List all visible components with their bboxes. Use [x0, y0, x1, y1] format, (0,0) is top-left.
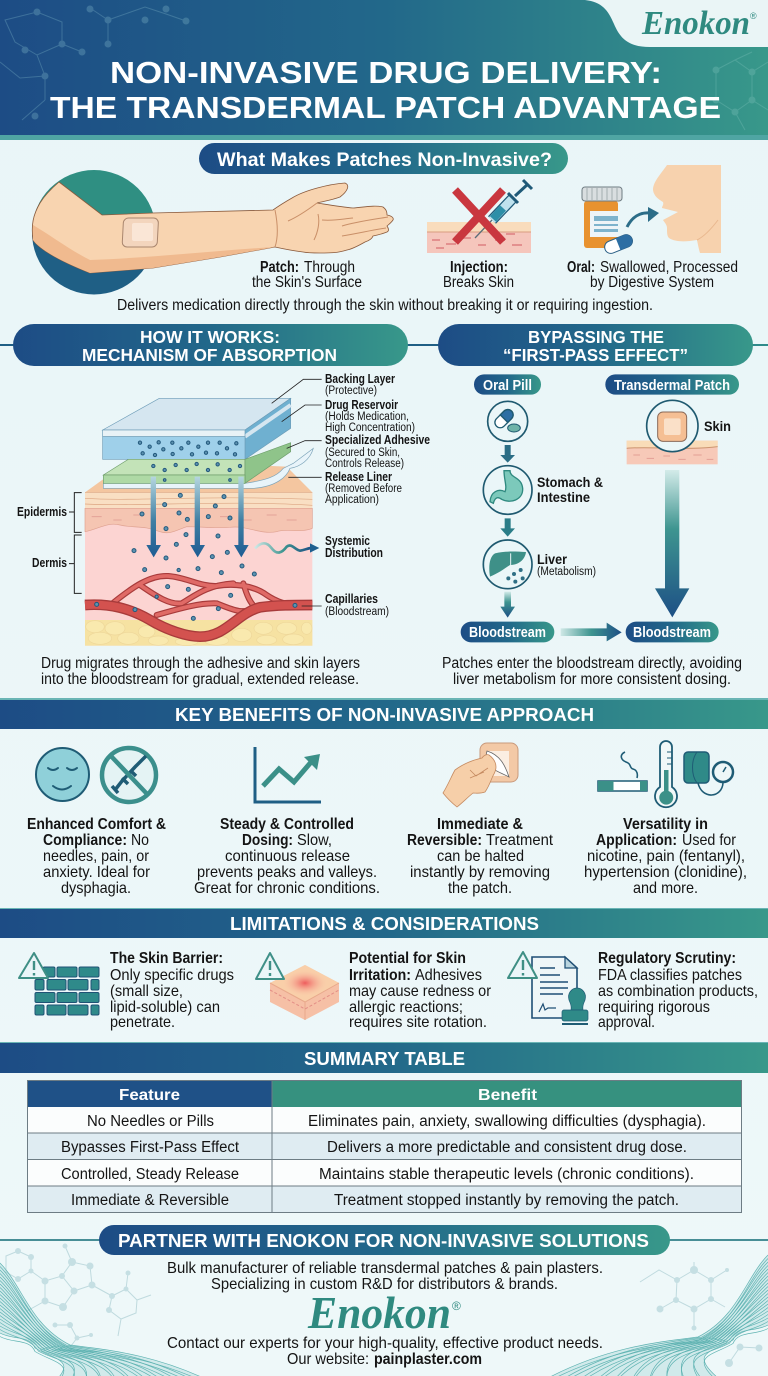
labels: patch layers: Capillaries — [325, 592, 378, 606]
labels: patch layers: (Secured to Skin, — [325, 447, 400, 459]
limitation: skin irritation: Adhesives — [415, 967, 482, 984]
captions: routes of delivery: Oral: — [567, 259, 595, 276]
limitation: skin irritation: allergic reactions; — [349, 999, 463, 1016]
benefit: comfort — [27, 816, 166, 897]
benefit: versatility: Application: — [596, 832, 677, 849]
benefit: reversible — [407, 816, 554, 897]
benefit: reversible: Reversible: — [407, 832, 482, 849]
labels: skin layers: Epidermis — [17, 505, 67, 519]
logo: top right: ® — [750, 11, 757, 21]
capillaries — [85, 576, 312, 637]
icon: rising chart — [255, 747, 321, 802]
title: THE TRANSDERMAL PATCH ADVANTAGE — [50, 90, 721, 125]
labels: patch layers: (Holds Medication, — [325, 411, 409, 423]
benefit: comfort: dysphagia. — [61, 880, 131, 897]
benefit: reversible: Treatment — [486, 832, 554, 849]
title — [50, 55, 721, 125]
benefit: reversible: instantly by removing — [410, 864, 550, 881]
limitation: regulatory scrutiny: Regulatory Scrutiny: — [598, 950, 736, 967]
captions: routes of delivery: Injection: — [450, 259, 508, 276]
labels: flow chart — [469, 378, 731, 641]
captions: routes of delivery: by Digestive System — [590, 274, 714, 291]
labels: flow chart: Stomach & — [537, 474, 603, 490]
benefit: reversible: the patch. — [448, 880, 512, 897]
icon: pill bottle and mouth — [582, 165, 721, 255]
skin brackets — [69, 493, 82, 593]
labels: flow chart: (Metabolism) — [537, 566, 596, 578]
labels: flow chart: Skin — [704, 418, 731, 434]
table rows: Eliminates pain, anxiety, swallowing difficulties (dysphagia). — [308, 1113, 706, 1130]
benefit: steady dosing: Steady & Controlled — [220, 816, 354, 833]
table rows: Controlled, Steady Release — [61, 1166, 239, 1183]
labels: patch layers: Release Liner — [325, 470, 392, 484]
text: manufacturer description — [167, 1260, 603, 1293]
labels: flow chart: Oral Pill — [483, 378, 532, 394]
labels: patch layers: (Bloodstream) — [325, 606, 389, 618]
backing and reservoir layers — [103, 398, 291, 459]
labels: skin layers: Dermis — [32, 556, 67, 570]
table header: Feature — [119, 1087, 180, 1104]
heading: how it works — [0, 324, 438, 366]
limitation: skin irritation: requires site rotation. — [349, 1014, 487, 1031]
benefit: versatility: and more. — [633, 880, 698, 897]
labels: flow chart: Intestine — [537, 489, 590, 505]
benefit: steady dosing: Dosing: — [242, 832, 293, 849]
labels: flow chart: Transdermal Patch — [614, 378, 730, 394]
text: first-pass summary — [442, 655, 742, 688]
icon: irritated skin — [256, 953, 339, 1020]
flow chart: oral vs transdermal — [461, 374, 739, 642]
captions: routes of delivery: Swallowed, Processed — [600, 259, 738, 276]
benefit: reversible: can be halted — [437, 848, 524, 865]
oral pill tag — [474, 374, 541, 395]
logo: footer: ® — [452, 1299, 461, 1313]
benefit: comfort: anxiety. Ideal for — [43, 864, 151, 881]
table rows: No Needles or Pills — [87, 1113, 214, 1130]
icon: hand removing patch — [443, 743, 518, 807]
heading: bypassing the first-pass effect: BYPASSING THE — [528, 327, 664, 347]
icon: patch on skin — [627, 400, 718, 464]
heading band: key benefits — [0, 698, 768, 729]
heading: bypassing the first-pass effect — [438, 324, 768, 366]
icon: arm with patch — [32, 170, 393, 294]
heading band: summary table: SUMMARY TABLE — [304, 1048, 465, 1069]
benefit: versatility: Versatility in — [623, 816, 708, 833]
skin layers — [85, 460, 312, 646]
heading band: limitations — [0, 908, 768, 938]
labels: patch layers: Application) — [325, 494, 379, 506]
systemic distribution arrow — [255, 543, 319, 553]
text: first-pass summary: liver metabolism for more consistent dosing. — [453, 671, 731, 688]
benefit: steady dosing: Slow, — [297, 832, 332, 849]
table rows: Bypasses First-Pass Effect — [61, 1139, 240, 1156]
benefit: comfort: Enhanced Comfort & — [27, 816, 166, 833]
benefit: steady dosing: Great for chronic conditions. — [194, 880, 380, 897]
leader lines — [272, 379, 322, 606]
limitation: skin barrier — [110, 950, 234, 1031]
benefit: versatility — [584, 816, 747, 897]
text: contact: Our website: — [287, 1351, 369, 1368]
table rows: Maintains stable therapeutic levels (chronic conditions). — [319, 1166, 694, 1183]
heading band: key benefits: KEY BENEFITS OF NON-INVASIVE APPROACH — [175, 704, 594, 725]
benefit: comfort: needles, pain, or — [43, 848, 150, 865]
text: non-invasive summary: Delivers medication directly through the skin without breaking it or requiring ingestion. — [117, 297, 653, 314]
captions: routes of delivery: Breaks Skin — [443, 274, 514, 291]
table header — [119, 1087, 538, 1104]
benefit: versatility: nicotine, pain (fentanyl), — [587, 848, 745, 865]
icon: calm face — [36, 748, 89, 801]
drug flow arrows — [146, 477, 249, 557]
limitation: skin barrier: penetrate. — [110, 1014, 175, 1031]
drug molecules — [95, 441, 297, 620]
labels: skin layers — [17, 505, 67, 570]
arrow: bloodstream link — [561, 623, 622, 641]
heading band: limitations: LIMITATIONS & CONSIDERATIONS — [230, 913, 539, 934]
labels: patch layers: Backing Layer — [325, 372, 395, 386]
summary table — [28, 1080, 742, 1212]
benefit: comfort: No — [131, 832, 149, 849]
logo: top right: Enokon — [641, 5, 750, 42]
text: absorption summary: into the bloodstream for gradual, extended release. — [41, 671, 359, 688]
limitation: skin irritation: Potential for Skin — [349, 950, 466, 967]
benefit: comfort: Compliance: — [43, 832, 127, 849]
table header: Benefit — [478, 1087, 538, 1104]
captions: routes of delivery: Through — [304, 259, 355, 276]
benefit: steady dosing: continuous release — [225, 848, 350, 865]
heading: how it works: MECHANISM OF ABSORPTION — [82, 345, 337, 365]
heading: how it works: HOW IT WORKS: — [140, 327, 280, 347]
diagram: patch layers over skin — [69, 379, 322, 646]
labels: flow chart: Liver — [537, 551, 567, 567]
heading: partner with enokon — [0, 1225, 768, 1255]
text: first-pass summary: Patches enter the bloodstream directly, avoiding — [442, 655, 742, 672]
limitation: skin barrier: Only specific drugs — [110, 967, 234, 984]
table rows: Treatment stopped instantly by removing the patch. — [334, 1192, 679, 1209]
bloodstream tags — [461, 622, 719, 642]
limitation: regulatory scrutiny — [598, 950, 758, 1031]
limitation: regulatory scrutiny: FDA classifies patches — [598, 967, 742, 984]
text: manufacturer description: Bulk manufacturer of reliable transdermal patches & pain plasters. — [167, 1260, 603, 1277]
logo: footer: Enokon — [307, 1287, 451, 1338]
text: contact: Contact our experts for your high-quality, effective product needs. — [167, 1335, 603, 1352]
labels: patch layers: Systemic — [325, 534, 370, 548]
labels: patch layers — [325, 372, 430, 618]
captions: routes of delivery — [252, 259, 738, 291]
text: contact: painplaster.com — [374, 1351, 482, 1368]
benefit: steady dosing: prevents peaks and valleys. — [197, 864, 377, 881]
heading: partner with enokon: PARTNER WITH ENOKON FOR NON-INVASIVE SOLUTIONS — [118, 1231, 649, 1251]
icon: regulatory document and stamp — [508, 952, 588, 1025]
icon: liver — [483, 540, 532, 589]
captions: routes of delivery: Patch: — [260, 259, 299, 276]
labels: patch layers: Specialized Adhesive — [325, 433, 430, 447]
labels: patch layers: Drug Reservoir — [325, 398, 398, 412]
arrows: oral path — [500, 445, 515, 618]
icon: no needles — [102, 748, 156, 802]
labels: patch layers: (Removed Before — [325, 483, 402, 495]
heading: what makes patches non-invasive — [199, 143, 568, 174]
limitation: skin barrier: The Skin Barrier: — [110, 950, 223, 967]
limitation: skin barrier: (small size, — [110, 983, 183, 1000]
limitation: regulatory scrutiny: approval. — [598, 1014, 655, 1031]
footer decoration: molecules and waves — [0, 1244, 768, 1376]
release liner — [103, 448, 313, 488]
table rows — [61, 1113, 706, 1209]
arrow: patch direct path — [655, 470, 689, 617]
text: absorption summary: Drug migrates through the adhesive and skin layers — [41, 655, 360, 672]
table rows: Delivers a more predictable and consistent drug dose. — [327, 1139, 687, 1156]
logo: top right — [585, 0, 768, 47]
limitation: skin barrier: lipid-soluble) can — [110, 999, 220, 1016]
benefit: versatility: Used for — [682, 832, 737, 849]
adhesive layer — [103, 443, 291, 483]
text: contact — [167, 1335, 603, 1368]
text: absorption summary — [41, 655, 360, 688]
title: NON-INVASIVE DRUG DELIVERY: — [110, 55, 662, 90]
benefit: versatility: hypertension (clonidine), — [584, 864, 747, 881]
benefit: steady dosing — [194, 816, 380, 897]
icon: pill — [488, 401, 528, 441]
labels: patch layers: (Protective) — [325, 385, 377, 397]
limitation: skin irritation: may cause redness or — [349, 983, 492, 1000]
benefit: reversible: Immediate & — [437, 816, 523, 833]
icon: stomach — [483, 466, 532, 514]
heading band: summary table — [0, 1042, 768, 1073]
heading: what makes patches non-invasive: What Makes Patches Non-Invasive? — [217, 150, 552, 171]
icon: cigarette, thermometer, blood pressure cuff — [598, 741, 733, 807]
captions: routes of delivery: the Skin's Surface — [252, 274, 362, 291]
header banner — [0, 0, 768, 140]
text: manufacturer description: Specializing in custom R&D for distributors & brands. — [211, 1276, 558, 1293]
limitation: skin irritation: Irritation: — [349, 967, 411, 984]
labels: flow chart: Bloodstream — [633, 625, 711, 641]
limitation: skin irritation — [349, 950, 492, 1031]
labels: patch layers: Distribution — [325, 546, 383, 560]
transdermal patch tag — [605, 374, 739, 395]
table rows: Immediate & Reversible — [71, 1192, 229, 1209]
labels: patch layers: Controls Release) — [325, 458, 404, 470]
heading: bypassing the first-pass effect: “FIRST-PASS EFFECT” — [503, 345, 688, 365]
icon: brick wall barrier — [19, 953, 99, 1015]
limitation: regulatory scrutiny: requiring rigorous — [598, 999, 710, 1016]
labels: flow chart: Bloodstream — [469, 625, 546, 641]
labels: patch layers: High Concentration) — [325, 422, 415, 434]
icon: injection crossed out — [427, 180, 532, 253]
